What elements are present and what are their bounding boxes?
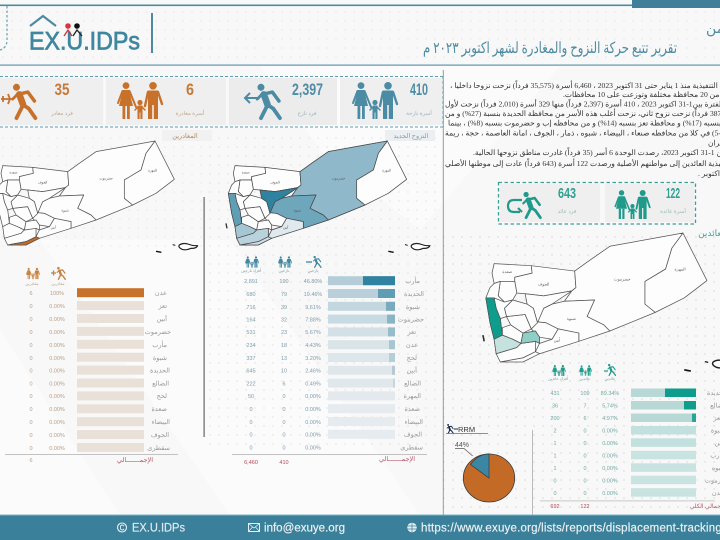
table: new displacement: 10 bbox=[281, 368, 287, 374]
table: departures: الجوف bbox=[151, 431, 169, 439]
table: new displacement: 645 bbox=[246, 368, 256, 374]
KPI: departed families: أسرة مغادرة bbox=[176, 108, 205, 117]
map: new displacement: أبين bbox=[283, 225, 288, 230]
table header icons: أفراد نازحين bbox=[241, 267, 261, 273]
map: departures: صعدة bbox=[9, 170, 17, 174]
table: returnees: 6 bbox=[583, 416, 587, 422]
map: returnees: صعدة bbox=[502, 269, 513, 274]
KPI: departed families bbox=[118, 80, 205, 119]
table: returnees: 1 bbox=[553, 466, 557, 472]
KPI: returnee families bbox=[615, 185, 686, 219]
table: departures: 6 bbox=[29, 291, 33, 297]
title bbox=[423, 22, 720, 57]
table: returnees: 5.74% bbox=[602, 404, 618, 410]
table: returnees: 0 bbox=[583, 478, 587, 484]
footer: copyright: EX.U.IDPs bbox=[132, 522, 185, 534]
table: new displacement: 0 bbox=[249, 446, 253, 452]
header band bbox=[0, 0, 720, 66]
table: departures: 0 bbox=[29, 330, 33, 336]
map: new displacement: حضرموت bbox=[332, 176, 345, 180]
table: new displacement: لحج bbox=[407, 354, 417, 362]
table: new displacement: 164 bbox=[246, 318, 256, 324]
table header icons bbox=[241, 256, 321, 273]
table: departures: 100% bbox=[50, 291, 64, 297]
table: departures: 0 bbox=[29, 317, 33, 323]
KPI: departed individuals bbox=[1, 80, 73, 118]
table: returnees bbox=[540, 364, 720, 510]
table: returnees: 122 bbox=[580, 504, 590, 510]
KPI: returnee individuals bbox=[508, 185, 577, 218]
footer bbox=[0, 514, 720, 540]
table: new displacement: 6 bbox=[282, 382, 286, 388]
table: departures: عدن bbox=[155, 290, 167, 297]
table: returnees: 0 bbox=[583, 428, 587, 434]
table: returnees: 0 bbox=[583, 466, 587, 472]
table: departures: 0 bbox=[29, 407, 33, 413]
map: new displacement bbox=[226, 141, 430, 252]
table: new displacement: 0 bbox=[249, 420, 253, 426]
table: departures: صعدة bbox=[152, 406, 167, 413]
table: departures bbox=[5, 267, 178, 464]
table: departures: تعز bbox=[157, 303, 167, 310]
table: new displacement: 0.00% bbox=[305, 446, 321, 452]
section dividers bbox=[204, 70, 533, 515]
table: new displacement: 234 bbox=[246, 343, 256, 349]
table header icons bbox=[548, 364, 615, 381]
table: new displacement: عدن bbox=[406, 342, 418, 349]
table: new displacement: الإجمـــــــالي bbox=[379, 455, 415, 463]
map: returnees: الجوف bbox=[538, 282, 549, 287]
KPI strip bbox=[0, 76, 443, 127]
map: departures: حضرموت bbox=[99, 176, 113, 180]
table: new displacement: 2.46% bbox=[305, 368, 321, 374]
returnees KPI box bbox=[498, 182, 696, 224]
table: new displacement: 23 bbox=[281, 330, 287, 336]
table: new displacement: تعز bbox=[406, 329, 416, 336]
table: new displacement: المهرة bbox=[403, 392, 421, 400]
table: new displacement: 4.43% bbox=[305, 343, 321, 349]
map: returnees: أبين bbox=[554, 337, 560, 343]
KPI: returnee individuals: فرد عائد bbox=[558, 208, 577, 215]
table: new displacement: 0 bbox=[282, 394, 286, 400]
table: returnees: 0.00% bbox=[602, 478, 618, 484]
table: departures: 0 bbox=[29, 446, 33, 452]
table: new displacement: 79 bbox=[281, 292, 287, 298]
table: returnees: 0 bbox=[583, 454, 587, 460]
table: departures: 0.00% bbox=[49, 433, 65, 439]
table header icons: أفراد عائدين bbox=[548, 375, 568, 381]
table: new displacement: 3.20% bbox=[305, 356, 321, 362]
table: returnees: 89.34% bbox=[601, 391, 619, 397]
KPI: returnee families: 122 bbox=[666, 185, 680, 202]
table: new displacement: 46.80% bbox=[304, 279, 322, 285]
table: returnees: 692 bbox=[550, 504, 560, 510]
table: new displacement: 0 bbox=[282, 420, 286, 426]
table header icons: مغادرين bbox=[51, 281, 65, 286]
table: departures: 0.00% bbox=[49, 356, 65, 362]
table: returnees: 1 bbox=[553, 441, 557, 447]
table: returnees: 0 bbox=[553, 478, 557, 484]
table: returnees: 4.97% bbox=[602, 416, 618, 422]
table: departures: 6 bbox=[29, 458, 33, 464]
table: departures: 0 bbox=[29, 433, 33, 439]
KPI: displaced families: 410 bbox=[410, 80, 428, 99]
KPI: departed individuals: 35 bbox=[54, 80, 70, 99]
table: new displacement: الجوف bbox=[404, 430, 422, 438]
footer: email: info@exuye.org bbox=[264, 522, 345, 534]
RRM pie chart: RRM bbox=[458, 425, 475, 434]
table: returnees: 200 bbox=[550, 416, 560, 422]
table: new displacement: 410 bbox=[279, 460, 289, 466]
table: departures: 0.00% bbox=[49, 304, 65, 310]
table: new displacement: 9.61% bbox=[305, 305, 321, 311]
table: new displacement: مأرب bbox=[405, 274, 421, 285]
table: new displacement: سقطرى bbox=[400, 444, 424, 452]
table: departures: 0.00% bbox=[49, 368, 65, 374]
map: returnees: المهرة bbox=[675, 267, 686, 272]
table: returnees: 0 bbox=[583, 441, 587, 447]
table: departures: 0.00% bbox=[49, 382, 65, 388]
table: returnees: 7 bbox=[583, 404, 587, 410]
table header icons: عائدين bbox=[605, 376, 615, 381]
section label: departures bbox=[162, 130, 212, 141]
table: new displacement: أبين bbox=[406, 364, 417, 374]
RRM pie chart: 44% bbox=[455, 442, 469, 449]
table: new displacement: 680 bbox=[246, 292, 256, 298]
table: returnees: 36 bbox=[552, 404, 558, 410]
table: new displacement: البيضاء bbox=[405, 418, 423, 426]
KPI: returnee families: أسرة عائدة bbox=[660, 206, 686, 215]
table: new displacement: 2,891 bbox=[244, 279, 258, 285]
section label: new displacement bbox=[385, 130, 435, 141]
table: departures: شبوة bbox=[153, 355, 168, 362]
map: new displacement: المهرة bbox=[382, 168, 391, 172]
table: new displacement: 337 bbox=[246, 356, 256, 362]
summary text bbox=[445, 79, 720, 178]
KPI: displaced individuals: فرد نازح bbox=[298, 110, 317, 117]
table: departures: 0.00% bbox=[49, 317, 65, 323]
table: returnees: 109 bbox=[580, 391, 590, 397]
table header icons: مغادرين bbox=[25, 281, 39, 286]
table: returnees: 431 bbox=[550, 391, 560, 397]
logo: EX.U.IDPs bbox=[29, 28, 140, 56]
map: departures: الجوف bbox=[38, 180, 47, 184]
table: new displacement: 0 bbox=[249, 407, 253, 413]
table: new displacement: 0 bbox=[282, 446, 286, 452]
table: departures: لحج bbox=[157, 392, 167, 400]
table: new displacement: 716 bbox=[246, 305, 256, 311]
KPI: departed individuals: فرد مغادر bbox=[50, 110, 73, 117]
table: new displacement: 0 bbox=[282, 432, 286, 438]
table: departures: أبين bbox=[156, 313, 167, 323]
map: new displacement: شبوة bbox=[294, 208, 301, 212]
table: new displacement: شبوة bbox=[406, 304, 421, 311]
table: new displacement: صعدة bbox=[405, 406, 420, 413]
footer: website: https://www.exuye.org/lists/reports/displacement-tracking bbox=[421, 522, 720, 534]
map: returnees: حضرموت bbox=[614, 277, 631, 282]
section label: departures: المغادرين bbox=[172, 132, 198, 140]
table: new displacement: 0 bbox=[282, 407, 286, 413]
table: departures: 0 bbox=[29, 420, 33, 426]
table: new displacement: 32 bbox=[281, 318, 287, 324]
KPI: departed families: 6 bbox=[186, 80, 194, 99]
table: departures: سقطرى bbox=[147, 444, 171, 452]
table: departures: مأرب bbox=[152, 338, 168, 349]
table: returnees: 1 bbox=[553, 454, 557, 460]
table: departures: الضالع bbox=[152, 380, 169, 388]
table: new displacement: حضرموت bbox=[398, 316, 424, 324]
KPI: displaced individuals: 2,397 bbox=[292, 80, 323, 99]
table: returnees: 0.00% bbox=[602, 454, 618, 460]
table: new displacement: 18 bbox=[281, 343, 287, 349]
map: departures: أبين bbox=[51, 225, 56, 230]
table: new displacement: 531 bbox=[246, 330, 256, 336]
table: departures: 0 bbox=[29, 394, 33, 400]
map: returnees: شبوة bbox=[567, 316, 576, 321]
map: returnees bbox=[483, 233, 720, 371]
table: returnees: 0.00% bbox=[602, 428, 618, 434]
table: departures: 0.00% bbox=[49, 330, 65, 336]
table: new displacement: 0.00% bbox=[305, 432, 321, 438]
table: departures: حضرموت bbox=[145, 329, 171, 336]
table: departures: 0 bbox=[29, 368, 33, 374]
table: new displacement: 6,460 bbox=[244, 460, 258, 466]
table: departures: 0.00% bbox=[49, 420, 65, 426]
map: new displacement: صعدة bbox=[242, 170, 250, 174]
table: returnees: 0 bbox=[553, 491, 557, 497]
table header icons: نازحين bbox=[308, 268, 318, 273]
map: departures: شبوة bbox=[61, 208, 69, 212]
table header icons: نازحين bbox=[278, 268, 290, 273]
table header icons bbox=[25, 267, 65, 286]
map: new displacement: الجوف bbox=[270, 180, 280, 184]
table: new displacement: الحديدة bbox=[404, 290, 424, 298]
table: new displacement: 0.49% bbox=[305, 382, 321, 388]
map: departures bbox=[0, 141, 198, 252]
KPI: displaced individuals bbox=[245, 80, 323, 118]
KPI: displaced families: أسرة نازحة bbox=[406, 108, 432, 117]
table header icons: عائدين bbox=[580, 376, 590, 381]
table: new displacement: 190 bbox=[279, 279, 289, 285]
table: returnees: 0.00% bbox=[602, 491, 618, 497]
logo bbox=[29, 16, 140, 56]
section label: new displacement: النزوح الجديد bbox=[394, 132, 429, 140]
table: departures: 0 bbox=[29, 343, 33, 349]
table: new displacement: 13 bbox=[281, 356, 287, 362]
table: departures: 0.00% bbox=[49, 343, 65, 349]
map: departures: المهرة bbox=[148, 168, 157, 172]
table: returnees: 0.00% bbox=[602, 441, 618, 447]
table: new displacement: 0.00% bbox=[305, 407, 321, 413]
table: new displacement: 222 bbox=[246, 382, 256, 388]
table: departures: 0 bbox=[29, 382, 33, 388]
table: new displacement bbox=[232, 256, 427, 466]
table: new displacement: 19.46% bbox=[304, 292, 322, 298]
KPI: returnee individuals: 643 bbox=[558, 185, 576, 202]
KPI: displaced families bbox=[353, 80, 432, 119]
table: returnees: 0.00% bbox=[602, 466, 618, 472]
table: new displacement: 0 bbox=[249, 432, 253, 438]
table: departures: 0 bbox=[29, 304, 33, 310]
table: new displacement: 50 bbox=[248, 394, 254, 400]
table: departures: الحديدة bbox=[150, 366, 170, 374]
table: new displacement: 39 bbox=[281, 305, 287, 311]
table: new displacement: 0.00% bbox=[305, 394, 321, 400]
table: departures: 0.00% bbox=[49, 407, 65, 413]
table: returnees: 0 bbox=[583, 491, 587, 497]
RRM pie chart bbox=[446, 424, 515, 502]
table: new displacement: الضالع bbox=[404, 380, 421, 388]
table: returnees: 2 bbox=[553, 428, 557, 434]
table: new displacement: 5.67% bbox=[305, 330, 321, 336]
table: new displacement: 7.88% bbox=[305, 318, 321, 324]
table: departures: 0.00% bbox=[49, 446, 65, 452]
table: departures: 0 bbox=[29, 356, 33, 362]
table: new displacement: 0.00% bbox=[305, 420, 321, 426]
table: departures: الإجمـــــــالي bbox=[117, 456, 153, 464]
table: departures: 0.00% bbox=[49, 394, 65, 400]
table: departures: البيضاء bbox=[152, 418, 170, 426]
